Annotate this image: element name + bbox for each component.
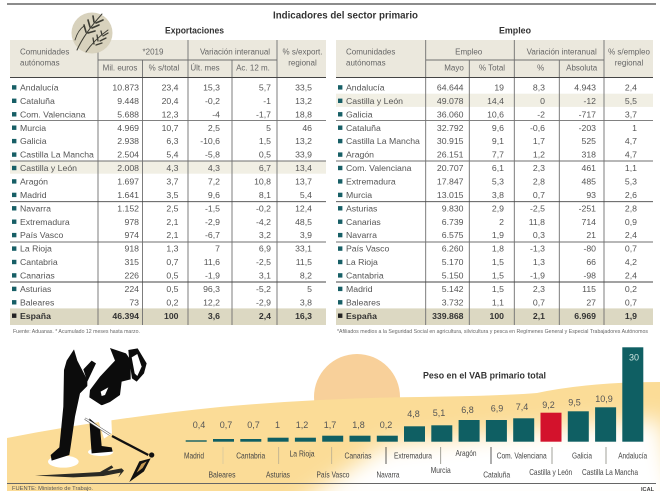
table rows: empleo: 2,4: [625, 82, 637, 92]
footnote: exportaciones: Fuente: Aduanas. * Acumulado 12 meses hasta marzo.: [13, 329, 140, 335]
table rows: empleo: Navarra: [346, 230, 377, 240]
table rows: exportaciones: 33,9: [295, 150, 312, 160]
table header: exportaciones: Mil. euros: [103, 64, 137, 72]
table rows: exportaciones: 23,4: [162, 82, 179, 92]
footnote: empleo: *Afiliados medios a la Seguridad Social en agricultura, silvicultura y pesca en Regímenes General y Especial Trabajadores Autónomos: [337, 329, 648, 335]
table rows: empleo: 32.792: [437, 123, 464, 133]
table rows: exportaciones: 96,3: [203, 284, 220, 294]
table header: empleo: Empleo: [455, 48, 483, 56]
white shoes: [48, 448, 113, 468]
table header: exportaciones: % s/export.: [282, 48, 323, 56]
table rows: exportaciones: Murcia: [20, 123, 46, 133]
table rows: empleo: Andalucía: [346, 82, 385, 92]
table rows: exportaciones: 18,8: [295, 109, 312, 119]
table header: exportaciones: autónomas: [20, 58, 60, 68]
table rows: empleo: 2,8: [625, 203, 637, 213]
table rows: exportaciones: 5: [266, 123, 271, 133]
table rows: empleo: 13.015: [437, 190, 464, 200]
bar values: 0,2: [380, 420, 392, 430]
table rows: empleo: 0,7: [533, 297, 545, 307]
table header: exportaciones: % s/total: [149, 64, 180, 72]
table rows: empleo: 0,2: [625, 284, 637, 294]
panel: empleo table: [336, 26, 653, 335]
table rows: empleo: Castilla y León: [346, 96, 403, 106]
table rows: exportaciones: 3,7: [166, 176, 179, 186]
table header: empleo: Absoluta: [566, 64, 598, 72]
title: Indicadores del sector primario: [273, 10, 418, 22]
bar values: 5,1: [433, 408, 445, 418]
table rows: exportaciones: -4,2: [256, 217, 271, 227]
table header: exportaciones: *2019: [143, 48, 164, 56]
table rows: exportaciones: Extremadura: [20, 217, 70, 227]
table rows: exportaciones: -0,2: [256, 203, 271, 213]
table rows: exportaciones: 1,5: [259, 136, 271, 146]
table rows: empleo: 9,1: [492, 136, 504, 146]
table rows: empleo: 1,1: [625, 163, 637, 173]
table rows: empleo: 93: [586, 190, 596, 200]
table rows: empleo: 1,3: [533, 257, 545, 267]
table rows: empleo: -251: [579, 203, 596, 213]
table rows: empleo: 9.830: [442, 203, 464, 213]
table rows: exportaciones: Cantabria: [20, 257, 58, 267]
table rows: exportaciones: 10,7: [162, 123, 179, 133]
table rows: exportaciones: 3,5: [166, 190, 179, 200]
table rows: exportaciones: -1: [263, 96, 271, 106]
table rows: exportaciones: 315: [124, 257, 139, 267]
table rows: empleo: 461: [582, 163, 596, 173]
table rows: exportaciones: España: [20, 311, 51, 321]
table rows: empleo: -1,9: [530, 270, 545, 280]
table rows: exportaciones: Madrid: [20, 190, 47, 200]
table rows: empleo: -717: [579, 109, 596, 119]
region labels: Galicia: [572, 450, 592, 460]
region labels: Canarias: [344, 450, 372, 460]
table rows: exportaciones: País Vasco: [20, 230, 63, 240]
region labels: Cantabria: [236, 450, 265, 460]
table rows: exportaciones: 3,9: [300, 230, 312, 240]
table rows: empleo: 5,3: [492, 176, 504, 186]
table rows: empleo: 10,6: [487, 109, 504, 119]
table rows: exportaciones: 13,2: [295, 96, 312, 106]
table rows: exportaciones: 0,5: [166, 284, 179, 294]
table header: empleo: Comunidades: [346, 48, 395, 56]
region labels: Baleares: [208, 469, 236, 479]
table rows: empleo: 30.915: [437, 136, 464, 146]
table rows: exportaciones: 5: [307, 284, 312, 294]
table rows: exportaciones: 5,4: [300, 190, 312, 200]
bar values: 6,9: [491, 404, 503, 414]
table rows: exportaciones: 13,7: [295, 176, 312, 186]
table rows: empleo: 0,7: [625, 297, 637, 307]
table rows: empleo: 27: [586, 297, 596, 307]
heading: exportaciones: Exportaciones: [165, 26, 224, 36]
table rows: exportaciones: Asturias: [20, 284, 52, 294]
table rows: empleo: Murcia: [346, 190, 372, 200]
table rows: empleo: 0,7: [533, 190, 545, 200]
table rows: empleo: 5.150: [442, 270, 464, 280]
table rows: empleo: -1,3: [530, 244, 545, 254]
table rows: empleo: -2: [537, 109, 545, 119]
table rows: empleo: 1,1: [492, 297, 504, 307]
table rows: exportaciones: -2,9: [256, 297, 271, 307]
table header: empleo: %: [537, 64, 544, 72]
table rows: empleo: 4,7: [625, 136, 637, 146]
bar values: 0,7: [247, 420, 260, 430]
region labels: Madrid: [184, 450, 204, 460]
table rows: empleo: [346, 82, 637, 321]
table rows: empleo: Galicia: [346, 109, 373, 119]
table rows: exportaciones: Canarias: [20, 270, 55, 280]
table rows: empleo: 21: [586, 230, 596, 240]
bars: [186, 347, 643, 442]
table rows: exportaciones: 8,2: [300, 270, 312, 280]
table rows: empleo: 3.732: [442, 297, 464, 307]
bar values: 1,2: [296, 420, 308, 430]
table rows: exportaciones: 73: [129, 297, 139, 307]
table header: exportaciones: [20, 48, 323, 72]
table rows: exportaciones: 1.697: [117, 176, 139, 186]
bar values: 9,5: [568, 398, 581, 408]
table rows: exportaciones: 2,1: [166, 217, 179, 227]
table rows: exportaciones: Navarra: [20, 203, 51, 213]
table rows: exportaciones: -2,5: [256, 257, 271, 267]
table rows: empleo: 2,6: [625, 190, 637, 200]
table rows: empleo: Extremadura: [346, 176, 396, 186]
table rows: empleo: 5.170: [442, 257, 464, 267]
table rows: empleo: 49.078: [437, 96, 464, 106]
bar values: 4,8: [407, 409, 420, 419]
table rows: empleo: 19: [494, 82, 504, 92]
table rows: empleo: 2,8: [533, 176, 545, 186]
heading: empleo: Empleo: [499, 26, 531, 36]
table rows: empleo: 11,8: [529, 217, 545, 227]
table rows: exportaciones: 7: [215, 244, 220, 254]
table rows: empleo: Asturias: [346, 203, 378, 213]
table rows: empleo: 2,3: [533, 284, 545, 294]
table rows: empleo: 6,1: [492, 163, 504, 173]
table rows: exportaciones: 3,8: [300, 297, 312, 307]
table rows: empleo: 525: [582, 136, 596, 146]
table rows: empleo: 2,3: [533, 163, 545, 173]
table header: empleo: autónomas: [346, 58, 386, 68]
table rows: exportaciones: 7,2: [208, 176, 220, 186]
table rows: empleo: Cataluña: [346, 123, 381, 133]
table rows: exportaciones: -6,7: [205, 230, 220, 240]
table rows: empleo: 1,5: [492, 284, 504, 294]
table rows: empleo: 6.575: [442, 230, 464, 240]
table rows: exportaciones: 9,6: [208, 190, 220, 200]
credit: ICAL: ICAL: [641, 487, 655, 493]
table rows: exportaciones: 5,7: [259, 82, 271, 92]
bar chart: peso en el VAB: [184, 347, 647, 479]
table rows: empleo: 17.847: [437, 176, 464, 186]
table rows: exportaciones: -1,5: [205, 203, 220, 213]
table rows: exportaciones: 1.152: [117, 203, 139, 213]
table rows: empleo: 1,9: [492, 230, 504, 240]
table rows: exportaciones: 2.938: [117, 136, 139, 146]
table rows: empleo: 9,6: [492, 123, 504, 133]
table header: empleo: % Total: [479, 64, 505, 72]
table rows: empleo: Baleares: [346, 297, 381, 307]
bar values: 1: [275, 420, 280, 430]
table rows: empleo: 4.943: [574, 82, 596, 92]
table rows: exportaciones: 13,2: [295, 136, 312, 146]
bar values: [193, 352, 639, 430]
table rows: exportaciones: 4,3: [166, 163, 179, 173]
table rows: empleo: 0,7: [625, 244, 637, 254]
table header: exportaciones: Últ. mes: [190, 64, 220, 72]
table rows: exportaciones: Com. Valenciana: [20, 109, 86, 119]
table rows: empleo: 66: [586, 257, 596, 267]
bar values: 7,4: [516, 402, 528, 412]
table rows: exportaciones: 2.008: [117, 163, 139, 173]
shadow of farmer: [35, 465, 124, 477]
table rows: exportaciones: 2,4: [259, 311, 271, 321]
source note: FUENTE: Ministerio de Trabajo.: [12, 486, 93, 492]
table rows: exportaciones: 100: [164, 311, 179, 321]
table rows: exportaciones: 978: [124, 217, 139, 227]
table rows: empleo: 1,8: [492, 244, 504, 254]
region labels: Com. Valenciana: [497, 450, 547, 460]
table rows: exportaciones: Baleares: [20, 297, 55, 307]
bar values: 10,9: [595, 394, 613, 404]
table rows: exportaciones: 46.394: [112, 311, 139, 321]
table rows: empleo: 0,9: [625, 217, 637, 227]
table rows: exportaciones: 6,3: [166, 136, 179, 146]
row bullets: exportaciones: [12, 85, 16, 318]
table rows: empleo: -80: [583, 244, 596, 254]
table rows: exportaciones: 10,8: [254, 176, 271, 186]
table rows: empleo: País Vasco: [346, 244, 389, 254]
table rows: exportaciones: -1,7: [256, 109, 271, 119]
table rows: empleo: 6.969: [574, 311, 596, 321]
table rows: empleo: 2,1: [533, 311, 545, 321]
table header: exportaciones: Variación interanual: [200, 48, 270, 56]
table rows: empleo: 1,2: [533, 150, 545, 160]
table rows: empleo: 2,4: [625, 270, 637, 280]
table rows: exportaciones: -2,9: [205, 217, 220, 227]
region labels: Castilla y León: [529, 467, 572, 477]
region labels: La Rioja: [290, 449, 315, 459]
table rows: empleo: 339.868: [432, 311, 464, 321]
table rows: empleo: 485: [582, 176, 596, 186]
table rows: empleo: 318: [582, 150, 596, 160]
table rows: exportaciones: Andalucía: [20, 82, 59, 92]
table rows: exportaciones: 33,5: [295, 82, 312, 92]
table rows: exportaciones: 46: [302, 123, 312, 133]
table rows: empleo: 5.142: [442, 284, 464, 294]
table header: exportaciones: Ac. 12 m.: [236, 64, 270, 72]
table rows: exportaciones: 10.873: [112, 82, 139, 92]
table rows: empleo: Com. Valenciana: [346, 163, 412, 173]
table rows: exportaciones: Castilla y León: [20, 163, 77, 173]
table rows: exportaciones: 9.448: [117, 96, 139, 106]
table rows: exportaciones: 0,7: [166, 257, 179, 267]
table rows: empleo: -0,6: [530, 123, 545, 133]
table rows: empleo: 2,9: [492, 203, 504, 213]
table rows: empleo: 714: [582, 217, 596, 227]
region labels: [184, 448, 647, 479]
bar values: 0,4: [193, 420, 205, 430]
table rows: exportaciones: 2,5: [208, 123, 220, 133]
table rows: exportaciones: 6,9: [259, 244, 271, 254]
illustration: sun over sand landscape: [0, 300, 660, 496]
table rows: exportaciones: 226: [124, 270, 139, 280]
table rows: exportaciones: -10,6: [200, 136, 220, 146]
table rows: exportaciones: 224: [124, 284, 139, 294]
illustration: farmer hoeing: [35, 348, 154, 482]
table rows: empleo: 3,7: [625, 109, 637, 119]
table rows: empleo: La Rioja: [346, 257, 378, 267]
row bullets: empleo: [338, 85, 342, 318]
table rows: empleo: 20.707: [437, 163, 464, 173]
region labels: Navarra: [376, 469, 400, 479]
table rows: exportaciones: 16,3: [295, 311, 312, 321]
table rows: exportaciones: 48,5: [295, 217, 312, 227]
region labels: Andalucía: [618, 450, 647, 460]
region labels: Murcia: [431, 465, 451, 475]
table rows: exportaciones: 33,1: [295, 244, 312, 254]
table rows: exportaciones: 8,1: [259, 190, 271, 200]
table rows: empleo: -12: [583, 96, 596, 106]
table rows: exportaciones: 12,2: [203, 297, 220, 307]
table rows: exportaciones: Cataluña: [20, 96, 55, 106]
table rows: exportaciones: 4,3: [208, 163, 220, 173]
table rows: empleo: 1,5: [492, 270, 504, 280]
table rows: exportaciones: 0,5: [166, 270, 179, 280]
region labels: Aragón: [456, 448, 477, 458]
table rows: exportaciones: 4.969: [117, 123, 139, 133]
hoe: [85, 419, 154, 482]
table rows: exportaciones: -1,9: [205, 270, 220, 280]
table rows: exportaciones: 0,2: [166, 297, 179, 307]
table header: empleo: Variación interanual: [527, 48, 597, 56]
table rows: exportaciones: 2,5: [166, 203, 179, 213]
table rows: exportaciones: 12,3: [162, 109, 179, 119]
table rows: empleo: -203: [579, 123, 596, 133]
table rows: exportaciones: Galicia: [20, 136, 47, 146]
table rows: exportaciones: Castilla La Mancha: [20, 150, 94, 160]
panel: exportaciones table: [10, 26, 326, 335]
table rows: empleo: 100: [490, 311, 504, 321]
table rows: empleo: 26.151: [437, 150, 464, 160]
region labels: País Vasco: [316, 469, 350, 479]
table rows: empleo: 2: [499, 217, 504, 227]
table rows: empleo: 1: [632, 123, 637, 133]
chart title: Peso en el VAB primario total: [423, 370, 546, 382]
region labels: Extremadura: [394, 450, 432, 460]
table rows: exportaciones: 1,3: [166, 244, 179, 254]
table rows: exportaciones: 11,6: [204, 257, 220, 267]
table rows: exportaciones: 11,5: [296, 257, 312, 267]
table rows: exportaciones: -4: [212, 109, 220, 119]
table rows: empleo: 5,3: [625, 176, 637, 186]
table rows: exportaciones: 3,2: [259, 230, 271, 240]
table rows: empleo: Madrid: [346, 284, 373, 294]
table rows: empleo: Castilla La Mancha: [346, 136, 420, 146]
table header: empleo: Mayo: [444, 64, 464, 72]
table rows: exportaciones: 5,4: [166, 150, 179, 160]
table rows: empleo: 1,5: [492, 257, 504, 267]
table rows: empleo: Canarias: [346, 217, 381, 227]
table rows: exportaciones: 3,6: [208, 311, 220, 321]
table rows: empleo: 6.260: [442, 244, 464, 254]
table header: exportaciones: Comunidades: [20, 48, 69, 56]
table rows: empleo: Cantabria: [346, 270, 384, 280]
table rows: exportaciones: 12,4: [295, 203, 312, 213]
table rows: empleo: 115: [582, 284, 596, 294]
bar values: 30: [629, 352, 639, 362]
table rows: exportaciones: -5,8: [205, 150, 220, 160]
region labels: Cataluña: [483, 469, 510, 479]
table rows: exportaciones: [20, 82, 312, 321]
table rows: exportaciones: 15,3: [203, 82, 220, 92]
table rows: empleo: 3,8: [492, 190, 504, 200]
icon: wheat badge: [72, 12, 112, 54]
table rows: empleo: 5,5: [625, 96, 637, 106]
table header: empleo: regional: [615, 58, 643, 68]
table rows: exportaciones: 6,7: [259, 163, 271, 173]
table rows: empleo: 0,3: [533, 230, 545, 240]
table rows: empleo: Aragón: [346, 150, 374, 160]
bar values: 0,7: [220, 420, 232, 430]
table rows: exportaciones: Aragón: [20, 176, 48, 186]
table rows: empleo: España: [346, 311, 377, 321]
table rows: exportaciones: 1.641: [117, 190, 139, 200]
table header: empleo: % s/empleo: [608, 48, 650, 56]
table rows: empleo: 64.644: [437, 82, 464, 92]
table rows: empleo: -2,5: [530, 203, 545, 213]
table rows: empleo: 4,7: [625, 150, 637, 160]
table rows: exportaciones: 20,4: [162, 96, 179, 106]
table rows: exportaciones: -0,2: [205, 96, 220, 106]
bar values: 9,2: [542, 400, 555, 410]
table rows: empleo: 8,3: [533, 82, 545, 92]
farmer body: [51, 348, 147, 461]
region labels: Asturias: [266, 469, 290, 479]
table header: empleo: [346, 48, 650, 72]
table rows: exportaciones: 918: [124, 244, 139, 254]
table rows: exportaciones: 974: [124, 230, 139, 240]
table rows: empleo: 4,2: [625, 257, 637, 267]
table rows: empleo: 2,4: [625, 230, 637, 240]
bar values: 1,8: [352, 420, 365, 430]
region labels: Castilla La Mancha: [582, 467, 638, 477]
farmer shirt highlights: [96, 354, 142, 439]
table rows: exportaciones: 13,4: [295, 163, 312, 173]
table rows: exportaciones: 2.504: [117, 150, 139, 160]
table rows: empleo: 1,9: [625, 311, 637, 321]
table rows: empleo: -98: [583, 270, 596, 280]
table rows: empleo: 0: [540, 96, 545, 106]
table header: exportaciones: regional: [288, 58, 317, 68]
table rows: exportaciones: -5,2: [256, 284, 271, 294]
table rows: empleo: 6.739: [442, 217, 464, 227]
table rows: exportaciones: 5.688: [117, 109, 139, 119]
bar values: 6,8: [461, 405, 474, 415]
table rows: exportaciones: 2,1: [166, 230, 179, 240]
table rows: empleo: 36.060: [437, 109, 464, 119]
table rows: exportaciones: 3,1: [259, 270, 271, 280]
table rows: empleo: 7,7: [492, 150, 504, 160]
table rows: empleo: 14,4: [487, 96, 504, 106]
table rows: exportaciones: La Rioja: [20, 244, 52, 254]
table rows: exportaciones: 0,5: [259, 150, 271, 160]
table rows: empleo: 1,7: [533, 136, 545, 146]
bar values: 1,7: [324, 420, 336, 430]
